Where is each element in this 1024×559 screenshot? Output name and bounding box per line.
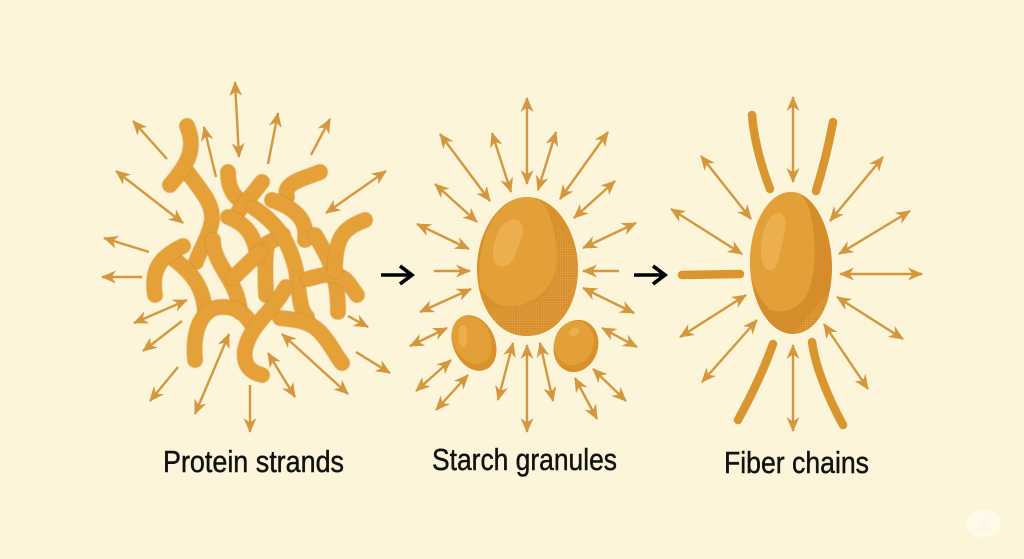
arrow: bottom right [540,343,553,401]
arrow: left 1 [104,238,149,252]
small starch granule right [547,314,605,378]
arrow: right [840,273,922,275]
arrow: upper left [701,156,751,219]
arrow: bottom [249,385,251,432]
arrow: small right granule lower 2 [575,378,597,419]
arrow: left lower 2 [143,321,182,351]
arrow: right lower [837,297,903,339]
arrows: fiber chains [671,97,922,431]
arrow: lower right [824,324,868,389]
watermark badge [966,510,1001,537]
arrow: right lower [583,288,634,313]
arrow: lower right 2 [282,334,348,394]
fiber strands [682,115,843,425]
arrow: upper left 2 [204,127,216,177]
arrow: right upper [326,171,386,213]
arrow: left upper [671,209,742,254]
panel: fiber chains [671,97,922,431]
label: protein strands: Protein strands [163,444,344,479]
arrow: lower left [702,320,757,382]
label: starch granules: Starch granules [432,442,617,477]
arrow: left upper [116,171,183,223]
arrow: top right 2 [560,132,608,199]
arrow: top left 1 [492,133,511,192]
arrow: top right 1 [538,132,556,190]
arrow: bottom [792,345,794,431]
panel: protein strands [102,82,390,432]
arrow: top left 2 [440,134,490,201]
arrow: small left granule outer [410,328,447,346]
arrow: left 2 [102,276,142,278]
arrow: left lower [680,295,746,337]
strands tangle [154,126,365,375]
arrow: second process arrow [634,266,665,284]
arrow: upper left 1 [133,121,167,159]
arrow: left lower [420,289,471,312]
arrow: right lower 1 [348,316,368,327]
arrow: small left granule lower 1 [416,360,451,391]
arrow: right inward [583,270,619,272]
arrow: first process arrow [381,266,412,284]
arrow: lower left 1 [150,367,178,401]
arrow: small right granule lower 1 [593,369,626,401]
arrow: upper left [435,184,477,222]
arrows: protein strands [102,82,390,432]
arrows: starch granules [410,98,637,432]
fiber central granule [750,192,832,334]
arrow: lower right 1 [268,353,295,397]
arrow: top [792,97,794,182]
arrow: small left granule lower 2 [436,375,468,410]
arrow: upper right [830,157,883,221]
arrow: right upper [839,211,910,254]
arrow: upper right 2 [311,119,330,155]
arrow: left lower 1 [134,300,187,323]
arrow: top [526,98,528,184]
arrow: left inward [434,270,470,272]
panel: starch granules [410,98,637,432]
watermark badge: ai [977,517,990,534]
small starch granule left [443,308,505,378]
arrow: upper right [574,181,615,218]
arrow: top [235,82,239,157]
arrow: right upper [583,223,636,248]
arrow: lower left 2 [195,334,229,414]
arrow: upper right 1 [268,113,278,164]
arrow: right lower 2 [356,352,390,373]
arrow: small right granule outer [602,328,637,347]
large starch granule [477,197,578,336]
arrow: left upper [417,224,469,249]
arrow: bottom left [498,343,513,400]
label: fiber chains: Fiber chains [724,445,869,480]
arrow: bottom [526,345,528,432]
